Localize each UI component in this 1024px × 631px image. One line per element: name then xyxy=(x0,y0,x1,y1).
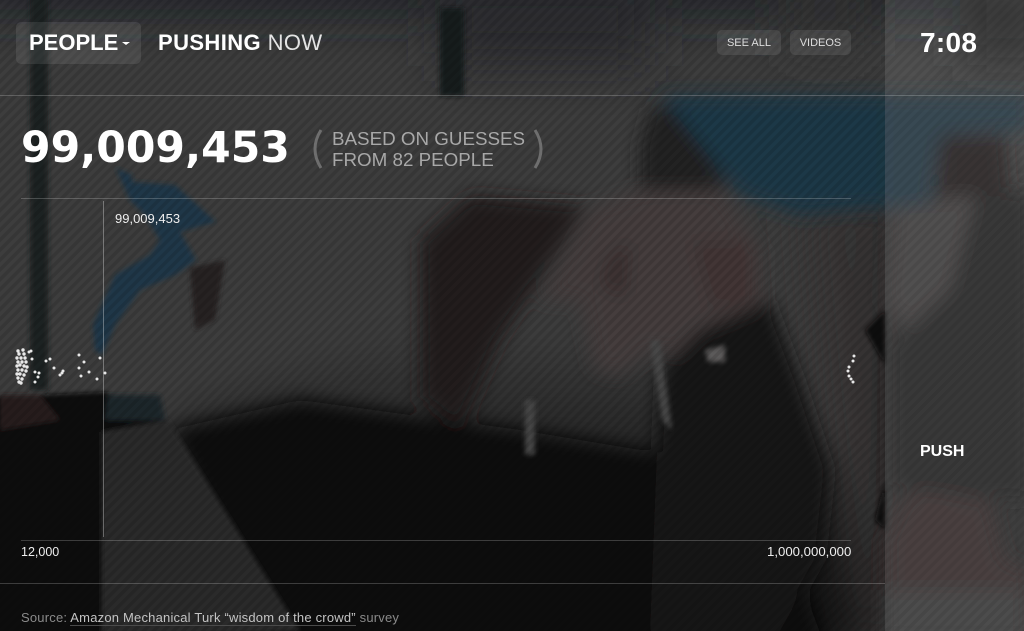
left bracket xyxy=(314,129,322,169)
axis minimum label: 12,000 xyxy=(21,545,59,559)
right bracket xyxy=(534,129,542,169)
guess dots xyxy=(15,348,856,385)
videos button: VIDEOS xyxy=(800,37,841,49)
axis maximum label: 1,000,000,000 xyxy=(767,544,851,559)
dropdown caret xyxy=(122,42,130,45)
sidebar overlay xyxy=(885,0,1024,631)
big estimate number: 99,009,453 xyxy=(21,124,290,173)
heading: pushing now: PUSHING NOW xyxy=(158,30,323,55)
videos button xyxy=(790,30,851,55)
source note: Source: Amazon Mechanical Turk “wisdom of the crowd” survey xyxy=(21,610,399,625)
timer: 7:08 xyxy=(920,27,977,58)
see all button: SEE ALL xyxy=(727,37,771,49)
see all button xyxy=(717,30,781,55)
people label: PEOPLE xyxy=(29,30,118,55)
marker value label: 99,009,453 xyxy=(115,211,180,226)
basis note xyxy=(332,128,525,170)
basis note: BASED ON GUESSES xyxy=(332,128,525,149)
push label: PUSH xyxy=(920,443,964,460)
lower darkening xyxy=(170,330,870,631)
basis note: FROM 82 PEOPLE xyxy=(332,149,494,170)
people dropdown button xyxy=(16,22,141,64)
estimate marker line xyxy=(102,201,104,537)
chart: guess distribution on log scale xyxy=(15,201,856,537)
